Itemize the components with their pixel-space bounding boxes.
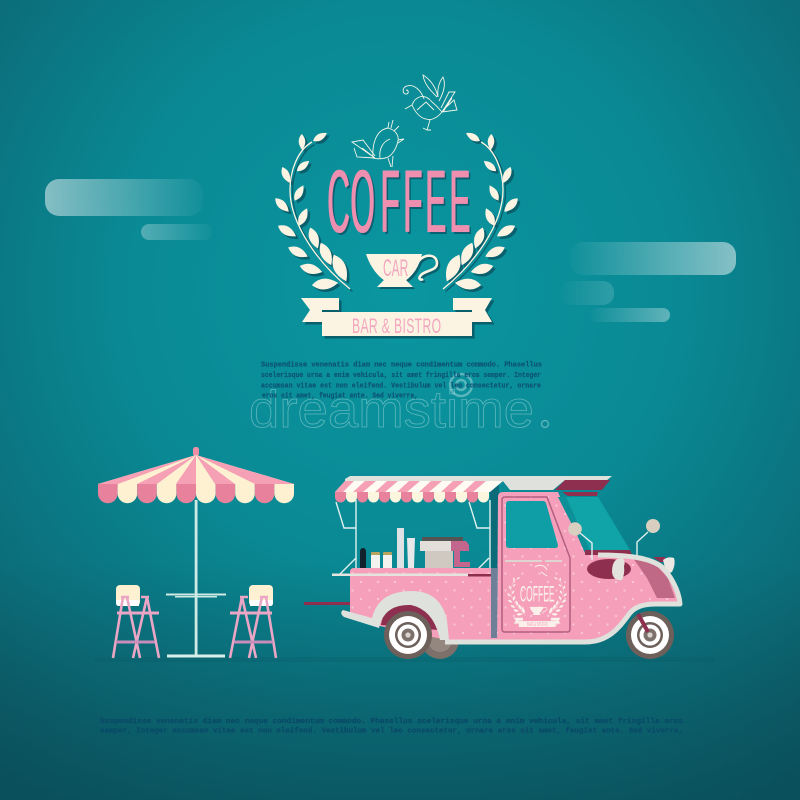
chair: right <box>230 585 276 658</box>
front cowl <box>633 558 675 598</box>
canopy stripes <box>98 455 294 484</box>
wreath shadow <box>275 133 523 293</box>
coffee machine <box>422 537 463 541</box>
icon: bird on the top <box>403 75 457 130</box>
pole <box>195 500 198 655</box>
ribbon shadow <box>304 300 494 338</box>
mirror: left <box>568 522 592 560</box>
wreath <box>272 130 521 291</box>
umbrella and table <box>98 447 294 658</box>
roof <box>345 476 612 496</box>
door handle <box>505 560 562 562</box>
rear fender <box>341 591 449 640</box>
side opening <box>587 559 631 579</box>
text block: upper paragraph <box>261 362 542 400</box>
heading thickening layer: COFFEE: COFFEE <box>328 153 471 252</box>
cab rear pillar <box>491 568 497 638</box>
logo: coffee car wreath badge <box>272 75 523 338</box>
icon: coffee cup <box>366 254 437 287</box>
cloud: left <box>45 179 213 240</box>
cloud: right <box>560 242 736 322</box>
heading: COFFEE: COFFEE <box>327 153 470 252</box>
windshield sill <box>585 550 632 555</box>
icon: bird perched on the letters <box>352 120 404 167</box>
heading shadow: COFFEE: COFFEE <box>329 155 472 254</box>
door <box>502 497 570 632</box>
awning <box>335 481 503 503</box>
cab <box>497 492 680 642</box>
text block: lower paragraph: Suspendisse venenatis diam nec neque condimentum commodo. Phasellus scelerisque urna a enim vehicula, sit amet fringilla eros <box>100 718 683 726</box>
cab trim <box>445 555 680 642</box>
counter shelf <box>332 574 468 576</box>
frame poles <box>336 500 490 574</box>
door window <box>506 501 558 548</box>
chair: left <box>113 585 159 658</box>
label: CAR: CAR <box>383 256 408 282</box>
canopy valance <box>98 484 294 503</box>
front wheel <box>626 611 674 659</box>
coffee truck <box>304 476 680 659</box>
icon: coffee cup shadow <box>368 256 439 289</box>
mirror: right <box>637 519 660 555</box>
hitch bar <box>304 602 352 605</box>
cab rear wall <box>490 482 499 572</box>
front maroon trim <box>653 557 665 562</box>
text block: upper paragraph: eros sit amet, feugiat ante. Sed viverra, <box>262 392 418 400</box>
door badge: BAR & BISTRO <box>527 621 548 627</box>
text block: lower paragraph: semper, Integer accumsan vitae est non eleifend. Vestibulum vel leo consectetur, ornare eros sit amet, feugiat ante. Sed viverra, <box>100 728 683 736</box>
door badge: COFFEE <box>520 582 555 607</box>
rear wheel <box>384 611 432 659</box>
text block: upper paragraph: accumsan vitae est non eleifend. Vestibulum vel leo consectetur, ornare <box>261 382 541 390</box>
body <box>350 568 497 640</box>
ground shadow <box>95 657 715 662</box>
thermos <box>360 548 366 568</box>
jars <box>371 555 380 568</box>
stacked cups <box>397 528 404 568</box>
counter items <box>360 528 470 568</box>
left headlight <box>612 558 625 580</box>
text block: upper paragraph: scelerisque urna a enim vehicula, sit amet fringilla eros semper. Integer <box>261 372 541 380</box>
table top <box>166 594 226 598</box>
rear far wheel <box>421 621 459 659</box>
door badge <box>507 565 567 627</box>
bottom shading <box>0 560 800 800</box>
canopy finial <box>193 447 199 456</box>
rear wheel arch <box>381 600 438 630</box>
table base <box>167 654 225 658</box>
watermark: dreamstime: dreamstime <box>249 381 534 439</box>
ribbon <box>301 298 492 336</box>
right headlight <box>663 557 675 573</box>
text block: upper paragraph: Suspendisse venenatis diam nec neque condimentum commodo. Phasellus <box>261 362 542 370</box>
label: BAR & BISTRO: BAR & BISTRO <box>352 313 441 338</box>
text block: lower paragraph <box>100 718 683 736</box>
windshield <box>558 497 630 550</box>
